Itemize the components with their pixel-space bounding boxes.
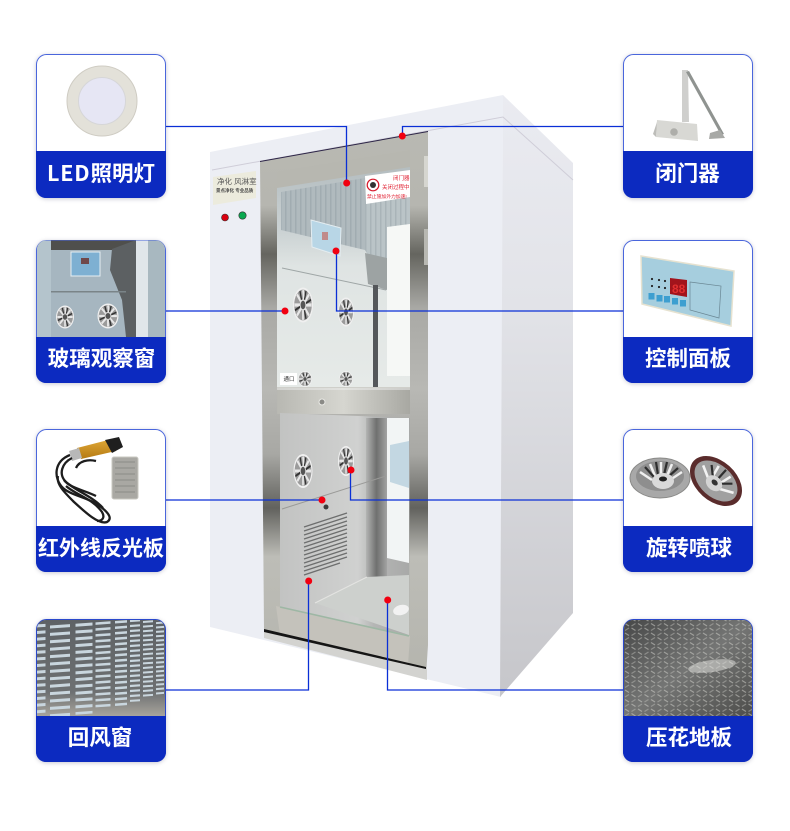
card: infrared reflector <box>36 430 166 572</box>
upper glass window <box>277 167 410 396</box>
nameplate: 景点净化 专业品质 <box>216 187 254 194</box>
caption: 玻璃观察窗 <box>48 342 155 373</box>
entrance tag: 通口 <box>284 375 295 383</box>
card: rotating nozzle <box>623 430 753 572</box>
warning sign: 关闭过程中 <box>382 183 410 191</box>
caption <box>623 337 753 383</box>
icon: door closer <box>653 70 725 141</box>
caption <box>36 526 166 572</box>
caption <box>623 716 753 762</box>
caption: 回风窗 <box>68 721 132 752</box>
caption: 红外线反光板 <box>38 532 164 562</box>
control buttons <box>222 212 246 221</box>
photo: window interior <box>37 240 165 337</box>
nameplate: 净化 风淋室 <box>217 176 257 186</box>
photo: perforated panel <box>37 616 165 720</box>
icon: chrome nozzle right <box>680 446 752 516</box>
caption: LED照明灯 <box>47 157 155 188</box>
icon: infrared sensor and cable <box>57 437 123 522</box>
warning sign: 闭门器 <box>393 174 410 182</box>
icon: chrome nozzle left <box>630 458 690 498</box>
warning sign <box>365 170 410 204</box>
caption: 旋转喷球 <box>646 532 732 562</box>
lower glass window <box>280 413 410 636</box>
icon: control panel: 88 <box>672 282 686 296</box>
middle rail with knob <box>277 388 410 414</box>
caption <box>36 337 166 383</box>
card: return air window <box>36 616 166 762</box>
card: observation window <box>36 240 166 383</box>
lower nozzle right <box>338 446 354 476</box>
caption <box>623 151 753 198</box>
lower nozzle left <box>294 454 312 488</box>
floor <box>315 575 409 635</box>
photo: checker plate <box>624 620 752 716</box>
cabinet top seams <box>212 117 573 180</box>
card: control panel <box>623 240 753 383</box>
card: door closer <box>623 54 753 198</box>
air shower cabinet <box>210 95 573 697</box>
card: embossed floor <box>623 620 753 762</box>
window reflection <box>387 418 409 563</box>
partial nozzle right <box>339 371 353 387</box>
cabinet side face <box>500 95 573 697</box>
icon: LED lamp <box>67 66 137 136</box>
sensor hole <box>324 504 328 510</box>
wall control sticker <box>311 220 341 256</box>
caption: 压花地板 <box>646 721 732 752</box>
upper nozzle left <box>293 288 313 322</box>
window light strip <box>387 224 410 376</box>
caption: 控制面板 <box>645 342 731 373</box>
caption <box>36 151 166 198</box>
card: LED lighting <box>36 54 166 198</box>
cabinet front face <box>210 95 503 697</box>
back column <box>366 418 387 578</box>
warning sign: 禁止施加外力加速! <box>367 193 407 200</box>
connector lines <box>166 126 623 690</box>
caption <box>36 716 166 762</box>
partial nozzle left <box>298 371 312 387</box>
return air grille <box>304 513 347 575</box>
caption: 闭门器 <box>655 157 720 188</box>
upper nozzle right <box>338 298 354 326</box>
icon: reflector plate <box>112 457 138 499</box>
icon: control panel <box>641 256 734 326</box>
caption <box>623 526 753 572</box>
nameplate <box>213 171 257 205</box>
white pipe object <box>392 603 410 617</box>
door frame <box>260 131 428 680</box>
red marker dots <box>282 132 406 604</box>
entrance tag <box>280 373 297 385</box>
